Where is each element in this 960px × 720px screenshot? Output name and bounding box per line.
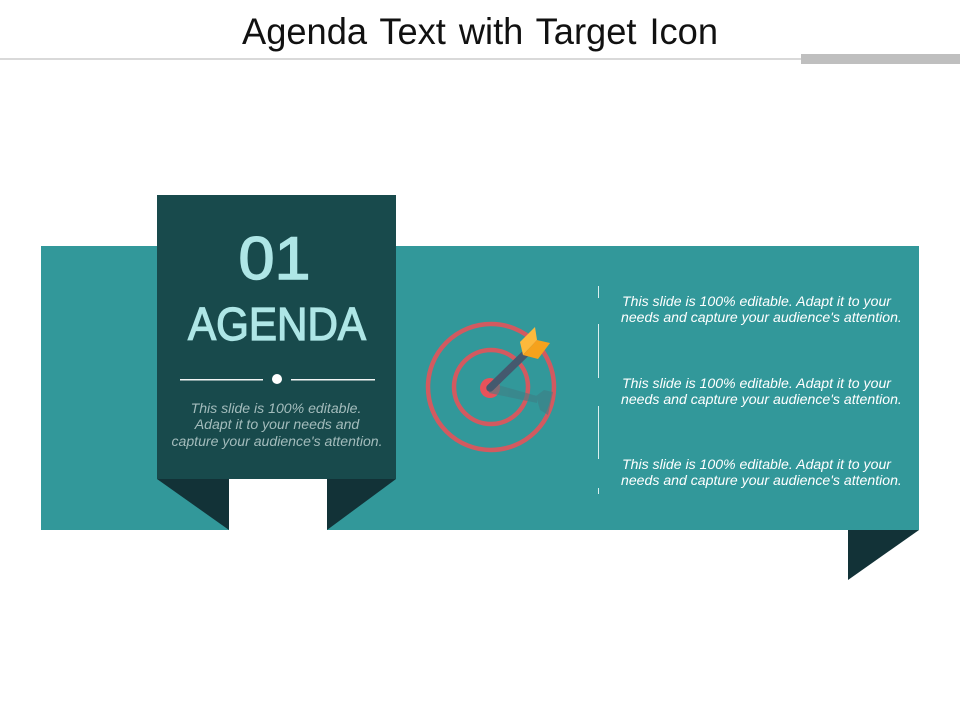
text block 1 <box>621 293 902 325</box>
text block 1: needs and capture your audience's attention. <box>621 309 902 325</box>
ribbon text: This slide is 100% editable. <box>191 400 361 416</box>
separator line <box>598 286 599 494</box>
arrow fletching <box>520 327 550 359</box>
ribbon left fold <box>157 479 229 530</box>
header rule <box>0 54 960 64</box>
ribbon body <box>157 195 396 479</box>
ribbon notch <box>229 479 327 531</box>
text block 1: This slide is 100% editable. Adapt it to your <box>622 293 892 309</box>
target center <box>480 378 500 398</box>
text block 2: This slide is 100% editable. Adapt it to your <box>622 375 892 391</box>
text block 3: needs and capture your audience's attention. <box>621 472 902 488</box>
title: Agenda Text with Target Icon <box>242 10 718 52</box>
text block 3: This slide is 100% editable. Adapt it to your <box>622 456 892 472</box>
panel: agenda ribbon <box>157 195 396 531</box>
arrow shaft <box>490 353 526 388</box>
divider with dot <box>180 374 375 384</box>
text block 2 <box>621 375 902 407</box>
ribbon text <box>171 400 383 449</box>
text block 2: needs and capture your audience's attention. <box>621 391 902 407</box>
number: 01 <box>238 225 310 292</box>
target rings <box>428 324 554 450</box>
banner fold <box>848 530 919 580</box>
ribbon text: Adapt it to your needs and <box>194 416 360 432</box>
teal banner <box>41 246 919 530</box>
ribbon text: capture your audience's attention. <box>171 433 383 449</box>
ribbon right fold <box>327 479 396 530</box>
heading: AGENDA <box>188 298 366 350</box>
arrow shadow <box>489 383 553 415</box>
text block 3 <box>621 456 902 488</box>
icon: target with arrow <box>428 324 554 450</box>
